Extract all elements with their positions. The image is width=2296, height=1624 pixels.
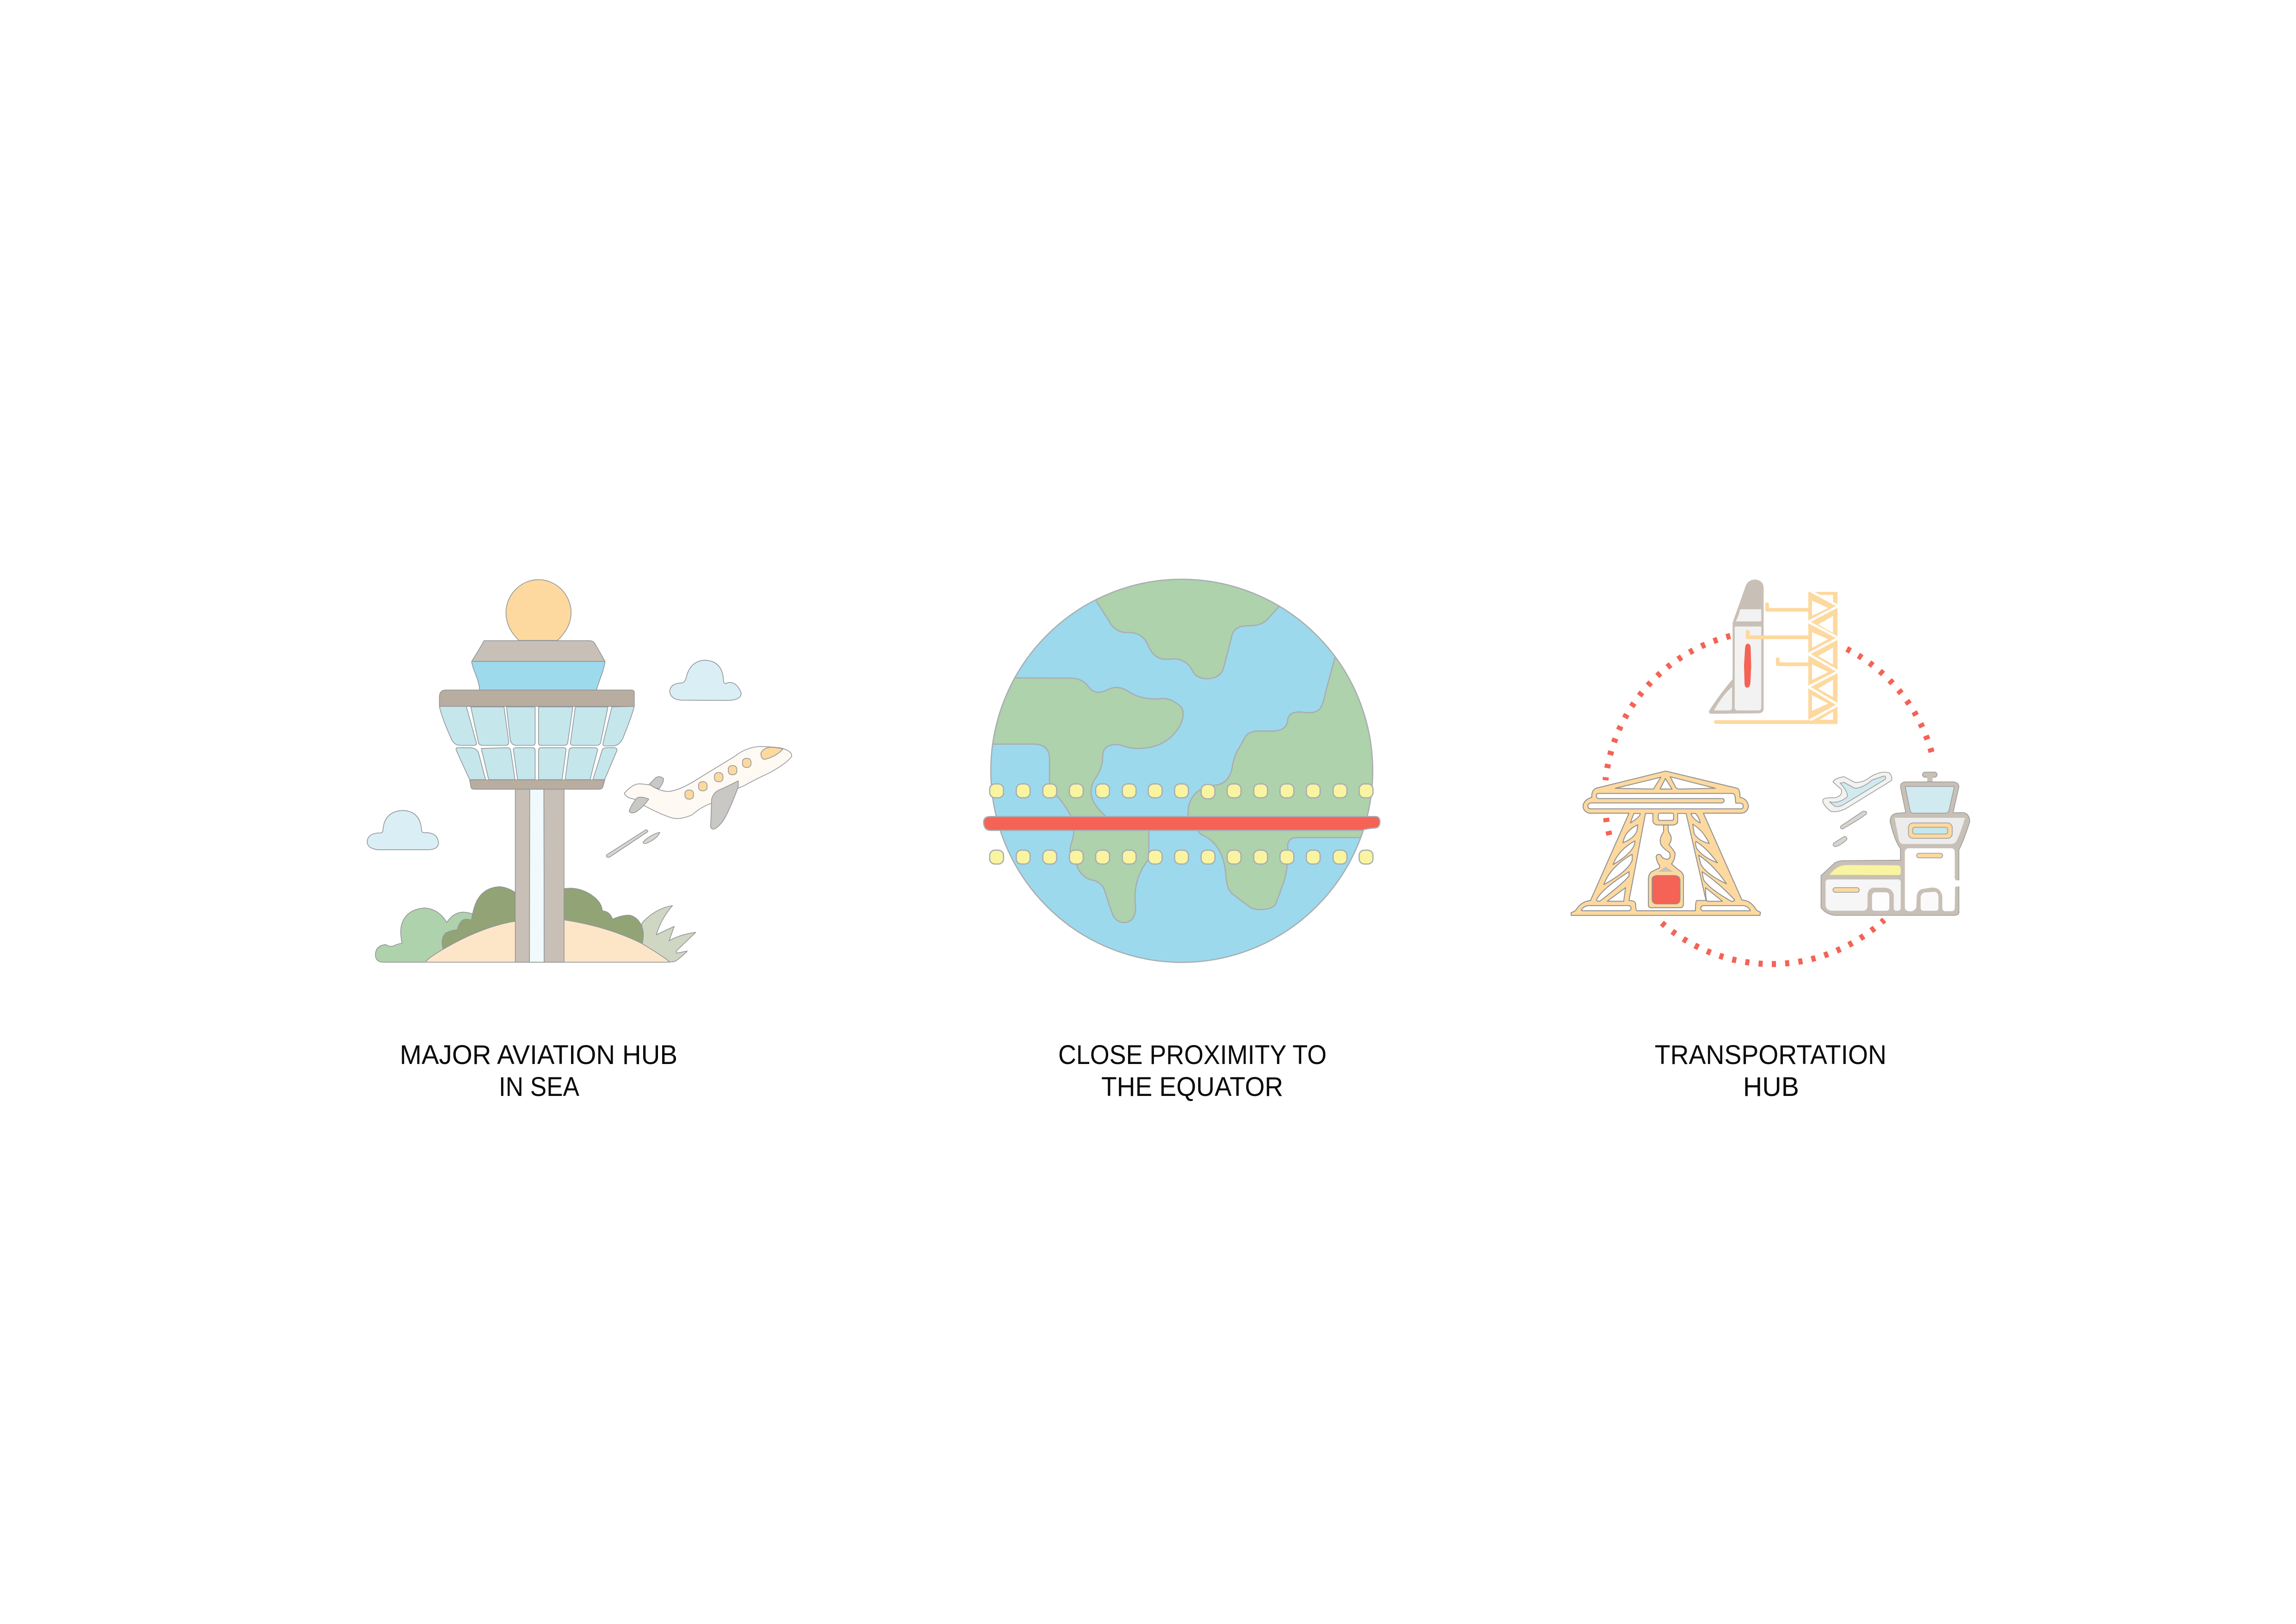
icon: globe outline	[991, 579, 1373, 962]
heading: close proximity to the equator label: CLOSE PROXIMITY TO	[1058, 1040, 1327, 1070]
infographic canvas	[366, 579, 1970, 1101]
icon: northern dotted line	[990, 784, 1373, 799]
heading: major aviation hub label: IN SEA	[499, 1072, 579, 1102]
icon: airport terminal and plane	[1821, 772, 1970, 915]
icon: control tower	[440, 579, 634, 962]
icon: left cloud	[367, 810, 439, 850]
heading: close proximity to the equator label: THE EQUATOR	[1101, 1072, 1283, 1102]
icon: continents	[981, 574, 1379, 922]
icon: port crane with cargo	[1571, 771, 1761, 915]
icon: red dotted ring	[1606, 636, 1933, 964]
icon: southern dotted line	[990, 850, 1373, 864]
icon: equator red band	[984, 816, 1380, 830]
icon: right cloud	[670, 660, 741, 700]
heading: transportation hub label	[1655, 1040, 1886, 1102]
icon: ocean	[991, 579, 1373, 962]
heading: major aviation hub label	[400, 1040, 677, 1102]
heading: transportation hub label: TRANSPORTATION	[1655, 1040, 1886, 1070]
icon: airplane taking off	[607, 747, 792, 857]
heading: major aviation hub label: MAJOR AVIATION HUB	[400, 1040, 677, 1070]
icon: rocket on launch gantry	[1709, 579, 1838, 724]
heading: close proximity to the equator label	[1058, 1040, 1327, 1102]
panel: major aviation hub illustration	[367, 579, 792, 962]
panel: transportation hub illustration	[1571, 579, 1970, 964]
heading: transportation hub label: HUB	[1743, 1072, 1799, 1102]
panel: globe with equator	[981, 574, 1380, 962]
icon: vegetation and hill	[375, 887, 696, 962]
